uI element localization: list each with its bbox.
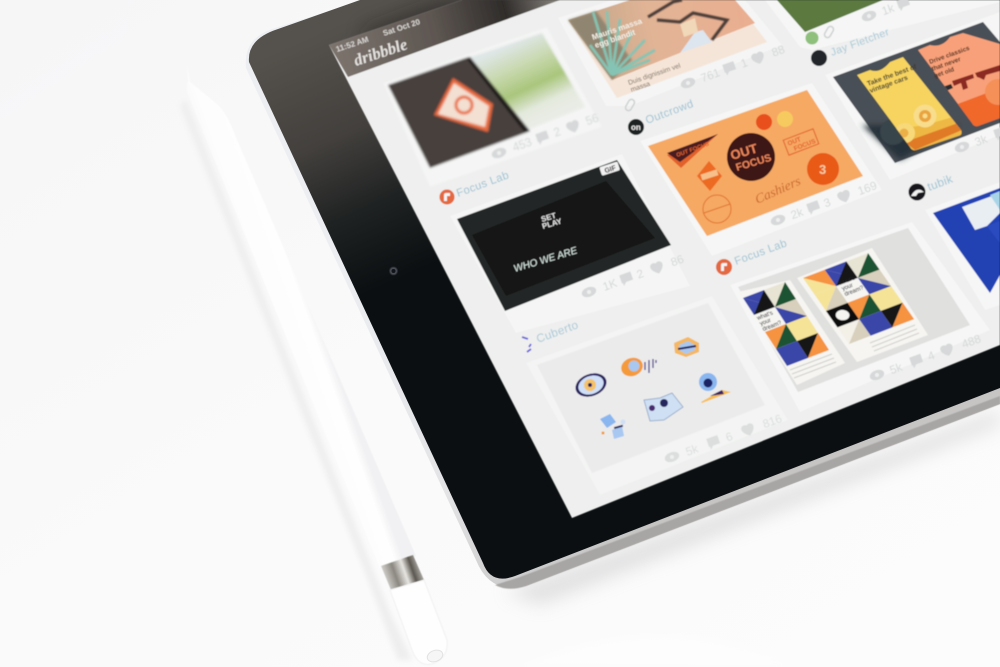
card: posters <box>730 222 990 412</box>
stylus cap <box>390 580 447 664</box>
out focus outline sticker <box>783 129 819 155</box>
poster left paper <box>738 280 845 385</box>
dark figure arms <box>648 0 727 40</box>
stats: posters: 488 <box>960 332 983 351</box>
tablet silver edge <box>246 0 1000 588</box>
pennant sticker <box>667 134 718 168</box>
stats: dark gif: 86 <box>669 253 686 269</box>
stats: Cuberto: 5k <box>684 442 700 459</box>
stylus <box>180 65 447 664</box>
front camera <box>390 267 398 275</box>
stats: phones: 3k <box>973 133 989 149</box>
stats: phones <box>953 126 1000 156</box>
icon: eye <box>572 369 610 401</box>
stats: posters <box>868 332 983 384</box>
label: green avatar and link <box>806 25 835 44</box>
stats: Cuberto <box>663 412 784 466</box>
stats: patch photo <box>490 112 601 162</box>
pennant sticker: OUT FOCUS <box>676 142 710 159</box>
poster right paper <box>797 248 928 362</box>
OUT FOCUS round sticker: OUT <box>729 141 759 163</box>
card: Cuberto icons <box>526 296 788 495</box>
out focus outline sticker: OUT <box>787 136 802 148</box>
stats: patch photo: 56 <box>584 112 601 129</box>
stylus cap end <box>426 648 444 664</box>
peach headline: egg blandit <box>593 28 637 50</box>
white bottle <box>680 30 712 53</box>
label: Outcrowd: on <box>631 123 641 132</box>
out focus outline sticker: FOCUS <box>793 138 817 153</box>
card: car app phones <box>832 22 1000 164</box>
card: Focus Lab patch photo <box>383 27 602 187</box>
label: Jay Fletcher <box>811 26 891 66</box>
poster right text: what's <box>838 275 856 287</box>
tablet shadow <box>505 410 1000 605</box>
bezel reflection <box>360 0 520 110</box>
stats: peach <box>679 43 787 92</box>
label: Focus Lab: Focus Lab <box>455 169 511 200</box>
OUT FOCUS round sticker <box>727 133 775 181</box>
text WHO WE ARE: WHO WE ARE <box>512 245 579 275</box>
stats: patch photo: 2 <box>552 126 563 140</box>
label: Cuberto: Cuberto <box>535 318 580 346</box>
stats: orange: 2k <box>789 206 805 222</box>
small yellow circle sticker <box>777 111 793 127</box>
stats: dark gif: 1K <box>601 277 619 294</box>
orange round badge <box>807 153 839 185</box>
icon: ear and sound waves <box>619 355 656 379</box>
stats: posters: 5k <box>888 361 904 377</box>
tablet black bezel <box>249 0 1000 579</box>
stats: orange <box>769 179 879 229</box>
stats: Cuberto: 6 <box>724 430 735 444</box>
poster left text: your <box>759 318 772 327</box>
Cashiers script: Cashiers <box>753 173 802 207</box>
stats: Cuberto: 816 <box>761 412 784 431</box>
icon: floating cubes <box>600 414 626 439</box>
stylus shadow <box>180 100 412 660</box>
label: tubik: tubik <box>926 172 955 194</box>
orange diamond badge <box>697 161 722 191</box>
orange phone headline: get old <box>933 66 955 80</box>
stats: patch photo: 453 <box>511 136 534 155</box>
jacket shoulder <box>388 58 525 168</box>
card: orange stickers <box>640 83 882 256</box>
poster left text: what's <box>756 310 774 322</box>
stats: green <box>860 0 911 25</box>
photo background <box>388 33 585 168</box>
stylus body <box>187 65 416 568</box>
orange phone headline: that never <box>931 56 962 73</box>
stylus metal ferrule <box>381 555 424 590</box>
icon: avatar on base <box>699 373 731 403</box>
poster left text: dream? <box>762 320 784 333</box>
poster right text: your <box>841 283 854 292</box>
label: Focus Lab second <box>716 237 789 275</box>
peach caption: massa <box>630 81 651 94</box>
small orange circle sticker <box>756 114 772 130</box>
status and header bar <box>329 0 560 77</box>
label: Focus Lab <box>440 169 511 204</box>
stats: peach: 761 <box>699 66 722 85</box>
card: peach photo <box>558 0 782 106</box>
orange diamond patch <box>434 78 493 132</box>
label: Focus Lab second: Focus Lab <box>733 237 789 268</box>
poster caption lines <box>790 325 919 378</box>
grey left shade <box>568 11 632 80</box>
stats: peach: 1 <box>739 56 750 71</box>
peach caption: Duis dignissim vel <box>627 63 682 87</box>
poster right artwork <box>803 253 914 344</box>
card: green top <box>765 0 1000 50</box>
status date: Sat Oct 20 <box>382 17 422 38</box>
stats: posters: 4 <box>926 349 937 363</box>
GIF badge <box>599 161 620 176</box>
label: tubik <box>908 172 955 200</box>
yellow phone headline: Take the best of <box>866 64 918 88</box>
bottle neck <box>680 18 698 37</box>
poster left artwork <box>743 282 829 366</box>
stats: orange: 3 <box>822 196 833 210</box>
poster right text: dream? <box>844 285 866 298</box>
status time: 11:52 AM <box>335 35 370 54</box>
peach headline: Mauris massa <box>591 17 643 42</box>
dark tyre <box>880 119 906 145</box>
card: dark WHO WE ARE gif: PLAY <box>541 216 564 231</box>
text SET PLAY: SET <box>540 211 557 224</box>
stats: green: 1k <box>880 2 896 18</box>
card: blue <box>925 182 1000 310</box>
yellow phone <box>855 55 965 155</box>
orange phone <box>915 30 1000 130</box>
link icon <box>624 98 636 112</box>
label: Outcrowd: Outcrowd <box>644 98 695 127</box>
OUT FOCUS round sticker: FOCUS <box>735 153 773 174</box>
tablet <box>246 0 1000 605</box>
yellow phone headline: vintage cars <box>869 75 909 95</box>
card: dark WHO WE ARE gif <box>450 154 690 333</box>
dark lower shade <box>862 125 960 160</box>
GIF badge: GIF <box>604 165 618 175</box>
stats: dark gif: 2 <box>635 267 646 282</box>
label: Cuberto <box>522 318 580 352</box>
orange round badge: 3 <box>819 162 826 177</box>
palm leaves <box>590 11 655 75</box>
dribbble logo: dribbble <box>351 34 410 70</box>
icon: cube hexagon <box>674 337 699 357</box>
tablet screen <box>329 0 1000 518</box>
lower chamfer <box>495 396 1000 589</box>
outline round badge <box>703 195 731 223</box>
stats: dark gif <box>580 253 686 301</box>
stats: peach: 88 <box>770 43 787 60</box>
orange phone headline: Drive classics <box>928 45 971 66</box>
icon: folded map <box>644 393 683 421</box>
peach skin background <box>568 0 755 80</box>
label: Jay Fletcher: Jay Fletcher <box>829 26 891 59</box>
screen background <box>329 0 1000 518</box>
stats: orange: 169 <box>856 179 879 198</box>
label: Outcrowd <box>628 98 695 135</box>
